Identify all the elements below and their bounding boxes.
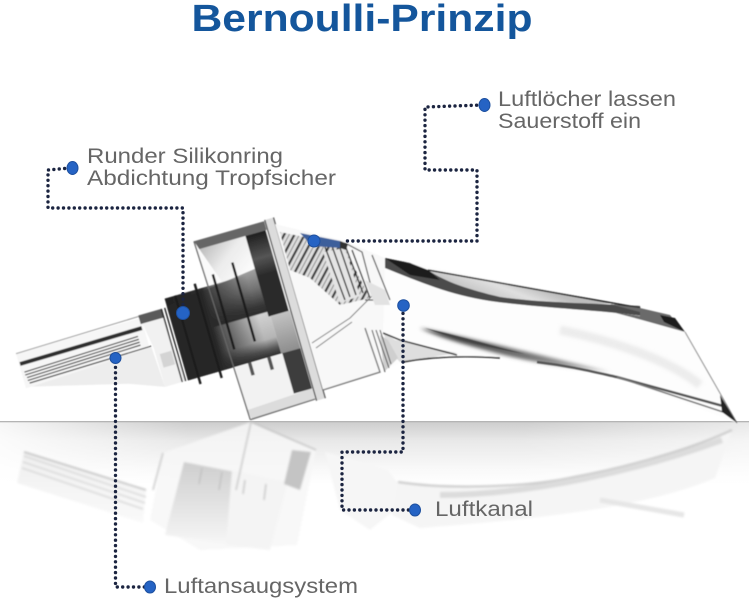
marker: Luftlöcher on product — [308, 235, 320, 247]
label: Luftkanal: Luftkanal — [435, 498, 533, 521]
wine aerator pourer product image — [0, 217, 737, 478]
spout — [345, 246, 737, 423]
cap body back — [194, 220, 319, 421]
marker: Silikonring on product — [176, 306, 190, 320]
label: Runder Silikonring — [87, 145, 336, 190]
cap dark band and rim — [194, 217, 327, 422]
label: Luftansaugsystem: Luftansaugsystem — [164, 575, 358, 598]
reflection of the pourer — [17, 422, 732, 550]
marker: Luftkanal end — [410, 504, 420, 516]
marker: Silikonring start — [67, 162, 78, 174]
leader: Silikonring — [48, 162, 183, 312]
marker: Luftansaugsystem on product — [110, 352, 121, 364]
label: Runder Silikonring: Abdichtung Tropfsicher — [87, 167, 336, 190]
label: Luftlöcher: Sauerstoff ein — [498, 110, 641, 133]
grey collar — [138, 309, 164, 324]
aeration chamber — [275, 224, 398, 390]
leader: Luftlöcher — [345, 98, 490, 241]
silicone ring dark cone — [164, 268, 281, 380]
marker: Luftlöcher start — [479, 98, 490, 112]
floor reflection surface — [0, 421, 749, 484]
label: Luftlöcher — [498, 88, 676, 133]
ribs — [171, 263, 262, 384]
stem tube — [15, 315, 165, 424]
label: Luftlöcher: Luftlöcher lassen — [498, 88, 676, 111]
white collar — [140, 308, 186, 388]
label: Runder Silikonring: Runder Silikonring — [87, 145, 283, 168]
leader: Luftkanal — [342, 308, 420, 516]
marker: Luftansaugsystem end — [144, 581, 156, 593]
leader: Luftansaugsystem — [116, 362, 156, 593]
marker: Luftkanal on product — [398, 300, 409, 311]
stopper drawn along tilted axis — [0, 217, 327, 478]
